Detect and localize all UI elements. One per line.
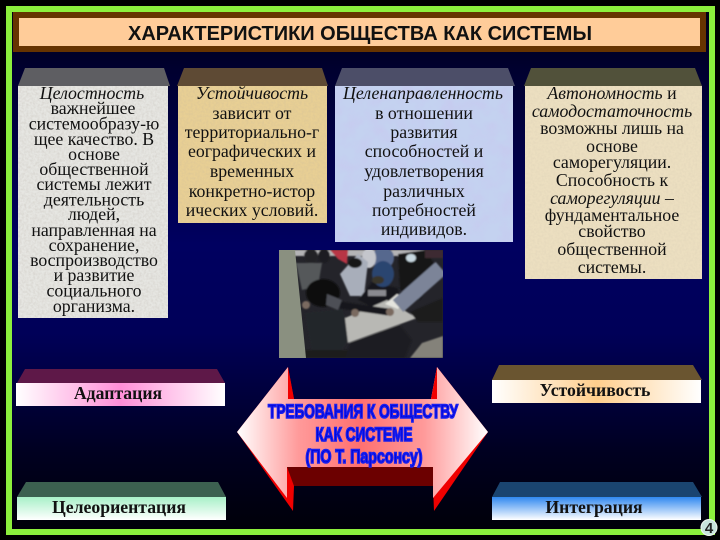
panel: автономность: самодостаточность (532, 101, 692, 121)
panel: автономность: общественной (557, 239, 667, 259)
bar: устойчивость (492, 365, 702, 403)
panel: целостность: и развитие (54, 265, 135, 285)
panel: устойчивость: ических условий. (186, 200, 318, 220)
panel: устойчивость: конкретно-истор (189, 181, 315, 201)
panel: автономность: системы. (578, 257, 646, 277)
panel: автономность (524, 68, 702, 279)
panel: целенаправленность: индивидов. (381, 219, 467, 239)
panel: автономность: свойство (578, 221, 646, 241)
panel: целостность: социального (46, 280, 142, 300)
panel: целостность: людей, (68, 204, 120, 224)
arrow heading text: (ПО Т. Парсонсу) (306, 447, 422, 468)
panel: устойчивость: территориально-г (185, 122, 319, 142)
arrow heading text (268, 402, 458, 468)
panel: целостность: организма. (53, 296, 135, 316)
bar: адаптация (16, 369, 225, 406)
panel: целенаправленность (335, 68, 515, 242)
panel: целостность: деятельность (44, 190, 144, 210)
panel: целостность: воспроизводство (30, 250, 158, 270)
panel: устойчивость: зависит от (213, 103, 292, 123)
panel: устойчивость: Устойчивость (196, 83, 308, 103)
arrow heading text: ТРЕБОВАНИЯ К ОБЩЕСТВУ (268, 402, 458, 423)
arrow heading text: КАК СИСТЕМЕ (316, 425, 412, 446)
bar: интеграция (492, 482, 702, 520)
panel: автономность: Способность к (556, 170, 668, 190)
page number badge: 4 (705, 520, 714, 537)
panel: целостность: общественной (39, 159, 149, 179)
panel: целостность: важнейшее (51, 98, 135, 118)
panel: целостность: щее качество. В (34, 129, 154, 149)
title bar (13, 12, 706, 52)
panel: целостность: системообразу-ю (29, 114, 159, 134)
arrow: double-headed 3D arrow with requirements text (237, 367, 488, 511)
panel: целенаправленность: в отношении (375, 103, 473, 123)
bar: адаптация: Адаптация (74, 383, 163, 403)
bar: целеориентация (17, 482, 226, 520)
panel: целостность: сохранение, (49, 235, 139, 255)
title bar: ХАРАКТЕРИСТИКИ ОБЩЕСТВА КАК СИСТЕМЫ (128, 23, 592, 45)
page number badge (701, 520, 717, 537)
bar: устойчивость: Устойчивость (540, 380, 650, 400)
panel: целостность: системы лежит (37, 174, 152, 194)
panel: автономность: возможны лишь на (540, 118, 684, 138)
panel: целенаправленность: Целенаправленность (342, 83, 503, 103)
panel: автономность: основе (586, 136, 638, 156)
panel: целостность (18, 68, 170, 318)
panel: целенаправленность: способностей и (365, 141, 484, 161)
panel: автономность: Автономность и (546, 83, 677, 103)
panel: целенаправленность: удовлетворения (364, 161, 484, 181)
panel: целостность: основе (68, 144, 120, 164)
bar: целеориентация: Целеориентация (52, 497, 186, 517)
panel: целенаправленность: потребностей (372, 200, 476, 220)
panel: автономность: фундаментальное (545, 205, 679, 225)
panel: целостность: Целостность (39, 83, 144, 103)
panel: целостность: направленная на (31, 220, 157, 240)
photo: clash of protesters and riot police (279, 247, 443, 358)
bar: интеграция: Интеграция (545, 497, 643, 517)
panel: автономность: саморегуляции. (553, 152, 671, 172)
panel: устойчивость: временных (210, 161, 294, 181)
panel: автономность: саморегуляции – (550, 188, 675, 208)
panel: целенаправленность: различных (383, 181, 465, 201)
panel: устойчивость: еографических и (188, 141, 317, 161)
panel: целенаправленность: развития (390, 122, 458, 142)
panel: устойчивость (177, 68, 328, 223)
